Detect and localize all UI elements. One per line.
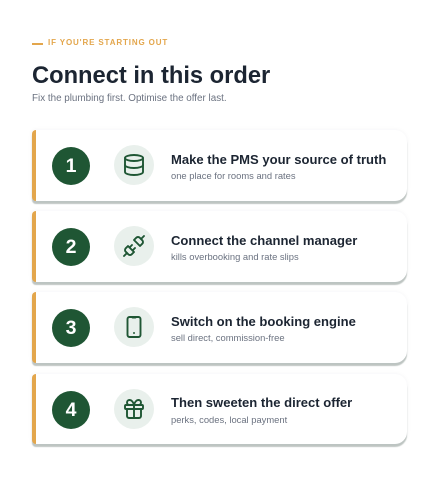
panel: step 3 <box>32 292 407 363</box>
step 1 heading: Make the PMS your source of truth <box>171 152 386 166</box>
eyebrow dash <box>32 43 43 45</box>
step 2 heading: Connect the channel manager <box>171 233 357 248</box>
step 3 heading: Switch on the booking engine <box>171 314 356 329</box>
step 4 description: perks, codes, local payment <box>171 414 287 425</box>
number badge 1 <box>52 147 90 185</box>
number badge 2: 2 <box>66 236 76 258</box>
number badge 2 <box>52 228 90 266</box>
panel: step 1 <box>32 130 407 200</box>
number badge 4: 4 <box>66 399 76 421</box>
panel: step 2 <box>32 211 407 282</box>
panel: step 4 <box>32 374 407 444</box>
step 3 description: sell direct, commission-free <box>171 332 285 343</box>
step 1 description: one place for rooms and rates <box>171 170 296 181</box>
icon: plug <box>114 226 154 266</box>
icon: database <box>114 145 154 185</box>
icon: gift <box>114 389 154 429</box>
subtitle: Fix the plumbing first. Optimise the offer last. <box>32 93 227 104</box>
title: Connect in this order <box>32 63 270 89</box>
number badge 3: 3 <box>66 317 76 339</box>
step 2 description: kills overbooking and rate slips <box>171 251 299 262</box>
icon: phone <box>114 307 154 347</box>
number badge 4 <box>52 391 90 429</box>
eyebrow text: IF YOU'RE STARTING OUT <box>48 38 168 47</box>
number badge 1: 1 <box>66 155 76 177</box>
step 4 heading: Then sweeten the direct offer <box>171 395 352 410</box>
number badge 3 <box>52 309 90 347</box>
